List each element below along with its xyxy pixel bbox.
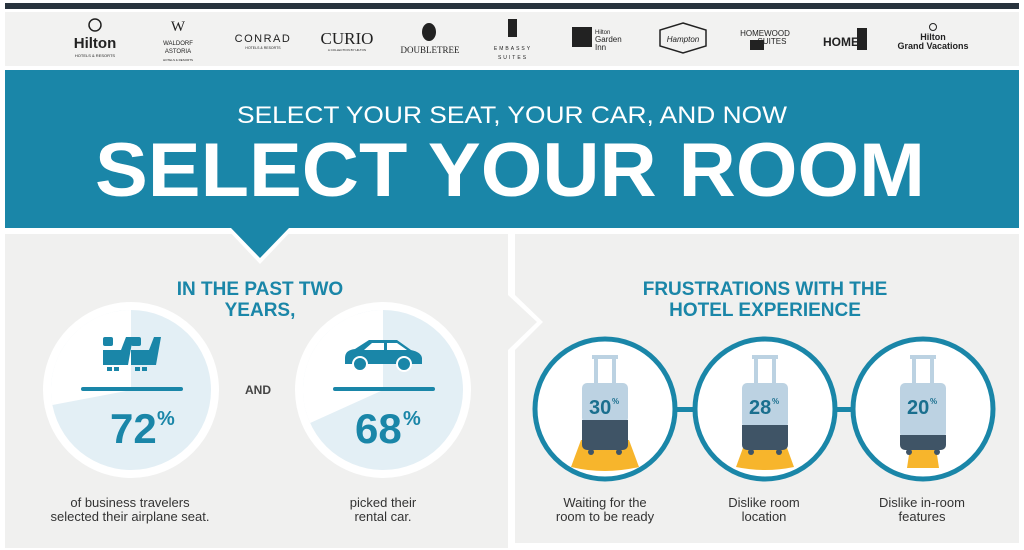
caption: car: picked their [350, 495, 417, 510]
heading: frustrations: HOTEL EXPERIENCE [669, 300, 861, 321]
captions: frustrations: Waiting for the [563, 495, 647, 510]
logo: Hilton Garden Inn: Hilton [595, 30, 610, 36]
label: and: AND [245, 383, 271, 397]
chart: 72% pie: 72 [110, 405, 157, 452]
logo: Hilton Grand Vacations: Hilton [920, 32, 946, 42]
logo: Waldorf Astoria [163, 19, 193, 62]
banner title: SELECT YOUR ROOM [95, 128, 925, 213]
logo: Embassy Suites: SUITES [498, 55, 528, 61]
logo: Conrad: HOTELS & RESORTS [245, 46, 281, 50]
panel: frustrations [515, 234, 1019, 543]
captions: frustrations: Dislike room [728, 495, 800, 510]
icon: suitcase 30%: 30 [589, 397, 611, 419]
captions: frustrations: features [899, 509, 946, 524]
logo: Hilton: HOTELS & RESORTS [75, 53, 115, 58]
logo: Hilton [74, 19, 116, 58]
logo: Home2: HOME [823, 35, 859, 49]
captions: frustrations [556, 495, 965, 524]
icon: suitcase 20%: 20 [907, 397, 929, 419]
caption: seat: of business travelers [70, 495, 190, 510]
chart: 68% pie: % [403, 408, 421, 430]
icon: car [345, 340, 422, 371]
heading: frustrations: FRUSTRATIONS WITH THE [643, 279, 887, 300]
icon: suitcase 30% [535, 339, 675, 479]
icon: suitcase 20% [853, 339, 993, 479]
logo: Hilton Garden Inn: Garden [595, 35, 622, 44]
logo: Embassy Suites [494, 19, 532, 61]
logo: Hilton Grand Vacations [897, 24, 969, 51]
logo: Embassy Suites: EMBASSY [494, 46, 532, 52]
chart: 72% pie [43, 302, 219, 478]
caption: car [350, 495, 417, 524]
logo: Waldorf Astoria: W [171, 19, 186, 35]
logo: Hampton: Hampton [667, 35, 700, 44]
captions: frustrations: room to be ready [556, 509, 655, 524]
logo: Homewood Suites: HOMEWOOD [740, 29, 790, 38]
icon: suitcase 20%: % [930, 397, 937, 406]
icon: seats [103, 337, 161, 371]
logo: Hilton: Hilton [74, 35, 116, 52]
panel: left stats [5, 228, 537, 548]
heading: in the past two years: IN THE PAST TWO [177, 279, 343, 300]
heading: in the past two years [177, 279, 343, 321]
heading: frustrations [643, 279, 887, 321]
banner subtitle: SELECT YOUR SEAT, YOUR CAR, AND NOW [237, 102, 787, 129]
chart: 68% pie: 68 [355, 405, 402, 452]
logo: Curio: A COLLECTION BY HILTON [328, 48, 366, 52]
icon: suitcase 28% [695, 339, 835, 479]
icon: suitcase 28%: 28 [749, 397, 771, 419]
logo band [5, 12, 1019, 66]
icon: suitcase 28%: % [772, 397, 779, 406]
logo: Hampton [660, 23, 706, 53]
logo: DoubleTree: DOUBLETREE [400, 45, 460, 55]
caption: car: rental car. [354, 509, 412, 524]
logo: Homewood Suites [740, 29, 790, 50]
logo: DoubleTree [400, 23, 460, 55]
heading: in the past two years: YEARS, [225, 300, 295, 321]
logo: Waldorf Astoria: WALDORF [163, 41, 193, 47]
chart: 72% pie: % [157, 408, 175, 430]
logo: Waldorf Astoria: ASTORIA [165, 49, 191, 55]
logo: Hilton Garden Inn [572, 27, 622, 52]
connectors [675, 407, 695, 412]
caption: seat [51, 495, 209, 524]
logo: Hilton Garden Inn: Inn [595, 43, 606, 52]
banner [5, 70, 1019, 228]
pointer arrow [226, 228, 294, 264]
top bar [5, 3, 1019, 9]
caption: seat: selected their airplane seat. [51, 509, 209, 524]
captions: frustrations: location [742, 509, 786, 524]
logo: Homewood Suites: SUITES [758, 37, 786, 46]
logo: Conrad: CONRAD [235, 33, 291, 45]
logo: Home2 [823, 28, 867, 50]
logo: Hilton Grand Vacations: Grand Vacations [897, 41, 969, 51]
icon: suitcase 30%: % [612, 397, 619, 406]
logo: Waldorf Astoria: HOTELS & RESORTS [163, 58, 193, 62]
captions: frustrations: Dislike in-room [879, 495, 965, 510]
chart: 68% pie [295, 302, 471, 478]
logo: Curio: CURIO [321, 29, 373, 48]
